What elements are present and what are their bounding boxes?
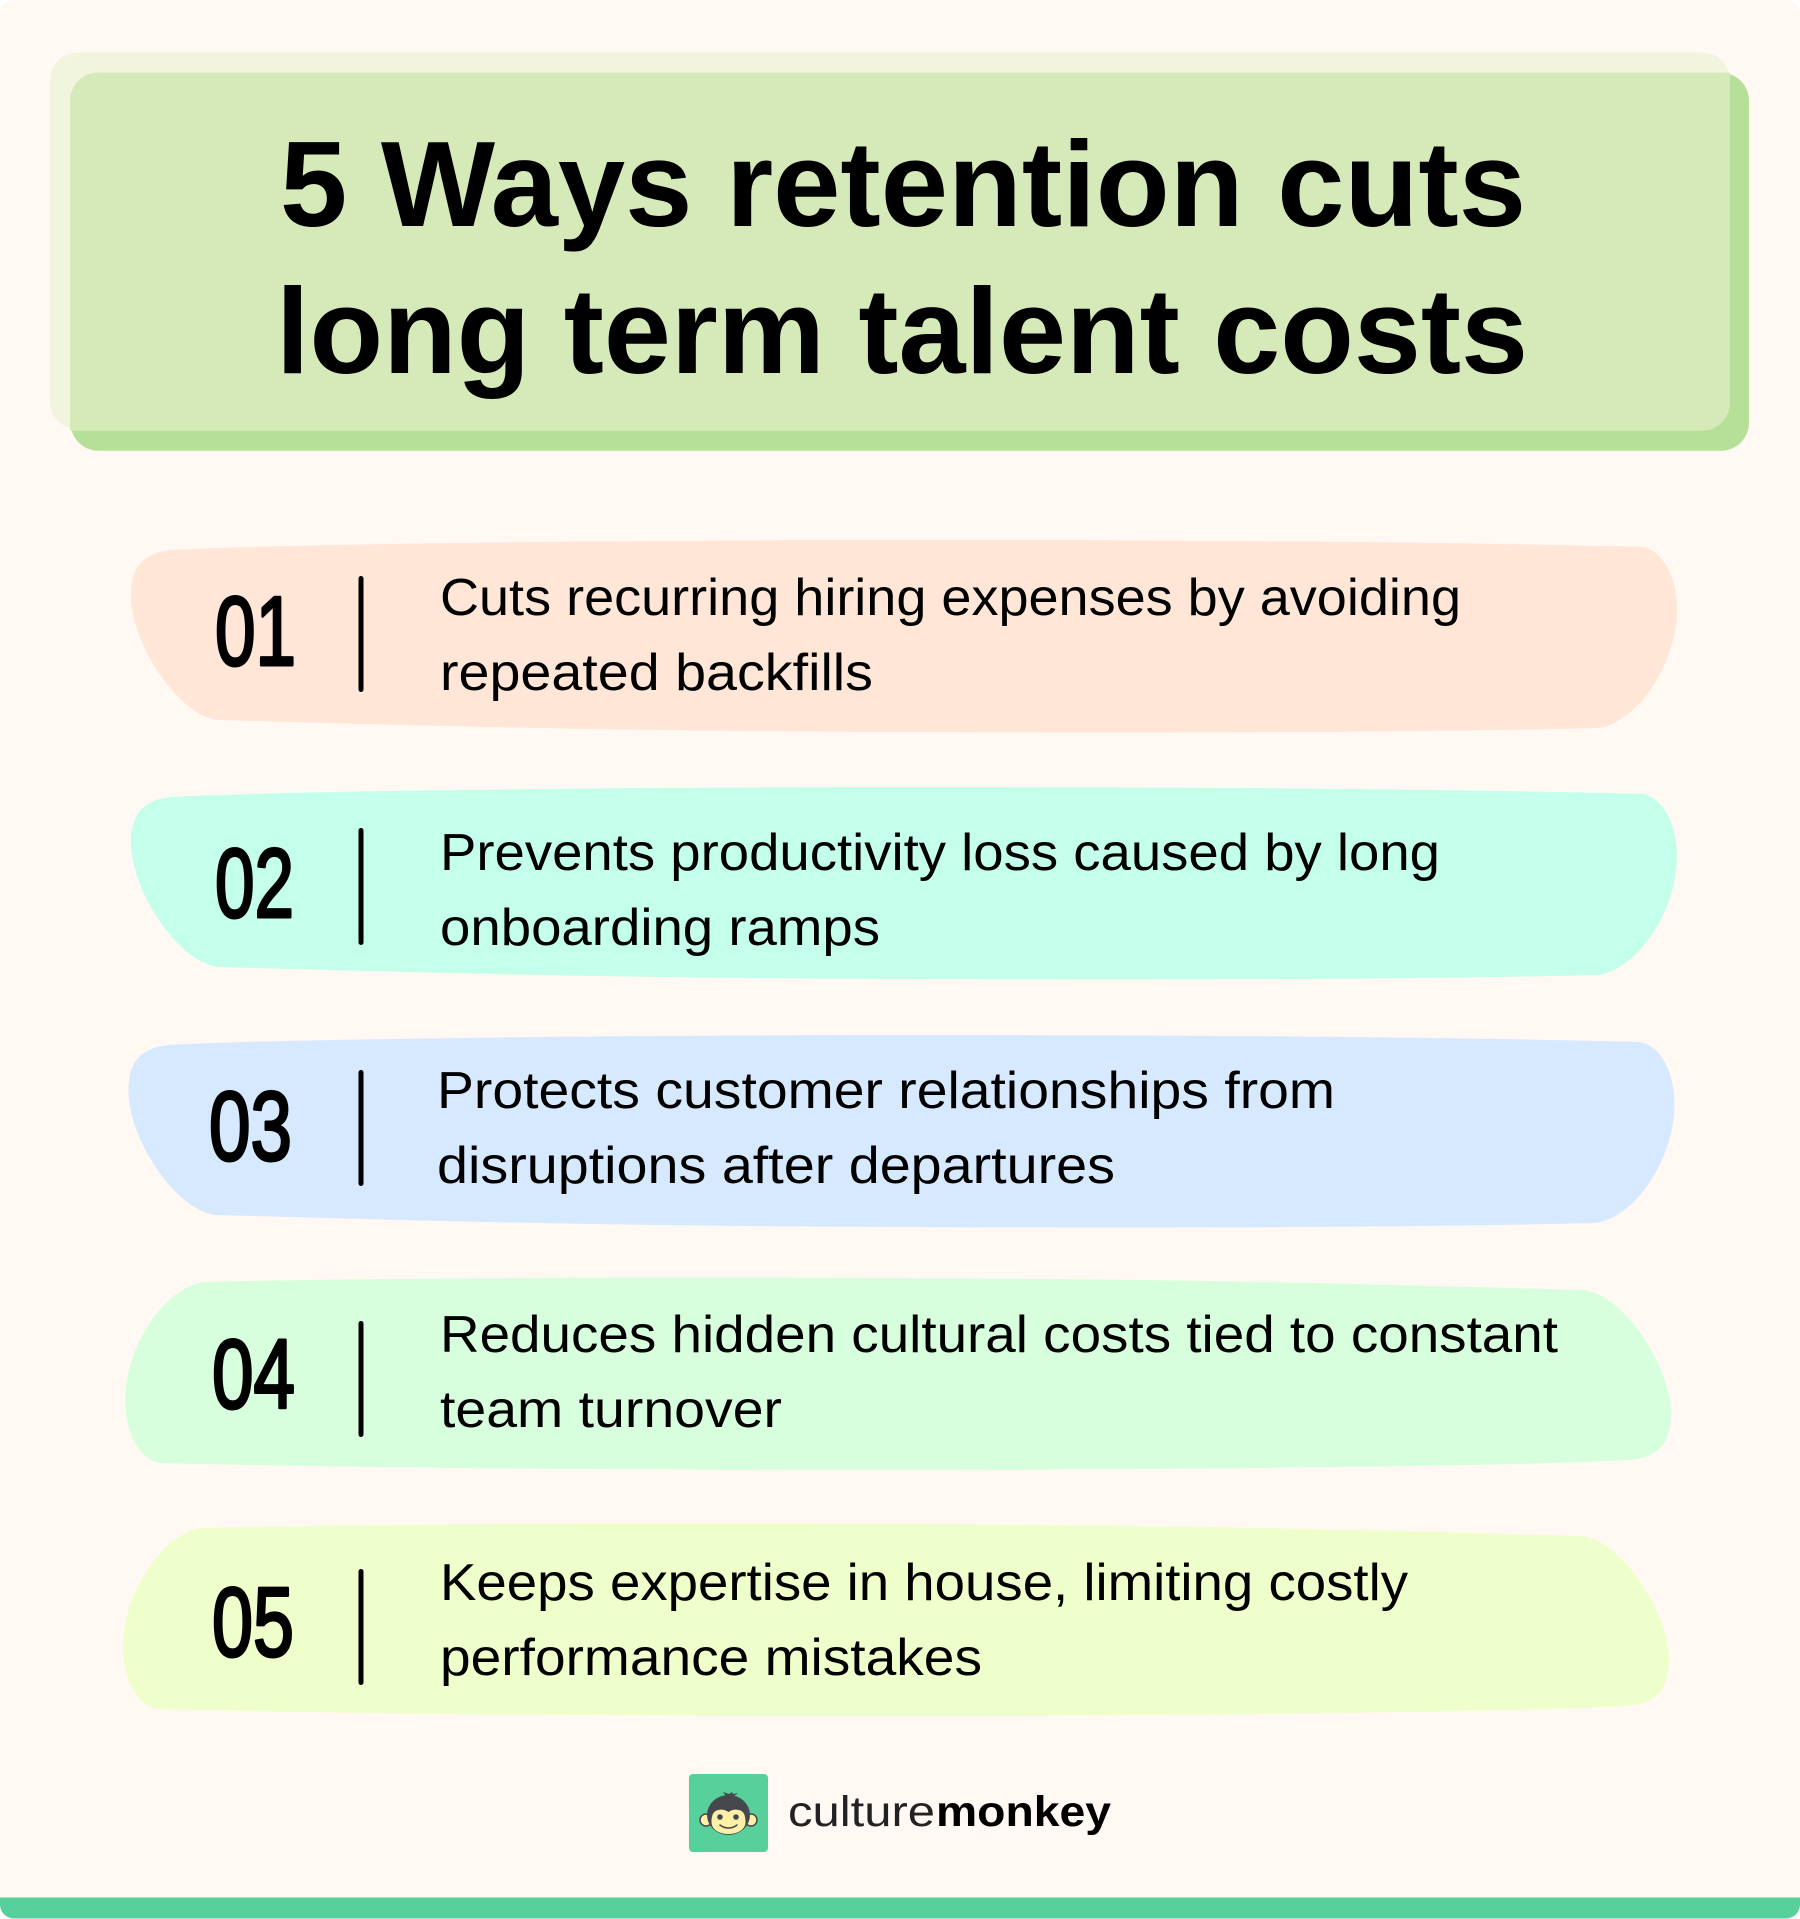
panel: item 03	[128, 1035, 1674, 1228]
panel: item 02: Prevents productivity loss caused by long	[440, 824, 1440, 882]
panel: item 01	[131, 540, 1677, 733]
title: 5 Ways retention cuts	[280, 116, 1526, 252]
panel: item 02: 02	[215, 828, 294, 938]
title: long term talent costs	[276, 263, 1528, 399]
panel: item 05: 05	[212, 1567, 294, 1677]
brand wordmark: monkey	[936, 1788, 1111, 1836]
title	[276, 116, 1528, 399]
panel: item 04: 04	[212, 1319, 295, 1429]
icon: culturemonkey logo	[689, 1774, 768, 1852]
panel: item 05: Keeps expertise in house, limiting costly	[440, 1554, 1408, 1612]
footer bar	[0, 1898, 1800, 1918]
panel: item 04	[125, 1277, 1671, 1470]
panel: item 04: team turnover	[440, 1381, 782, 1439]
title banner	[50, 52, 1749, 451]
panel: item 05	[123, 1523, 1669, 1716]
panel: item 04: Reduces hidden cultural costs tied to constant	[440, 1306, 1559, 1364]
panel: item 02: onboarding ramps	[440, 899, 880, 957]
panel: item 01: repeated backfills	[440, 644, 873, 702]
panel: item 01: Cuts recurring hiring expenses by avoiding	[440, 569, 1461, 627]
panel: item 03: disruptions after departures	[437, 1137, 1115, 1195]
brand wordmark	[788, 1788, 1111, 1836]
panel: item 05: performance mistakes	[440, 1629, 982, 1687]
panel: item 01: 01	[215, 576, 296, 686]
panel: item 02	[131, 787, 1677, 980]
panel: item 03: 03	[209, 1071, 292, 1181]
brand wordmark: culture	[788, 1788, 935, 1836]
panel: item 03: Protects customer relationships from	[437, 1062, 1335, 1120]
